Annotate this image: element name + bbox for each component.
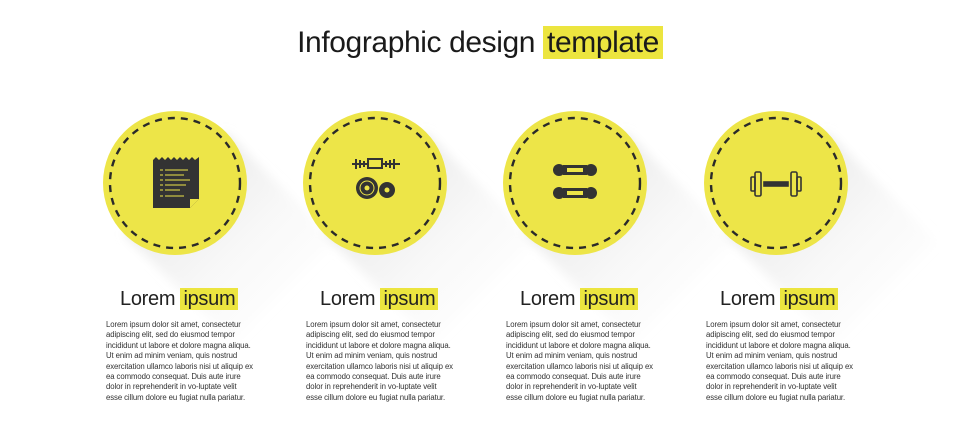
heading 1: Lorem ipsum	[120, 288, 235, 310]
icon: receipt	[153, 157, 199, 208]
circle 3	[503, 111, 647, 255]
icon: barbell and plates	[352, 159, 400, 199]
text 2: Lorem ipsum dolor sit amet, consectetur adipiscing elit, sed do eiusmod tempor incididunt ut labore et dolore magna aliqua. Ut enim ad minim veniam, quis nostrud exercitation ullamco laboris nisi ut aliquip ex ea commodo consequat. Duis aute irure dolor in reprehenderit in vo-luptate velit esse cillum dolore eu fugiat nulla pariatur.	[306, 320, 453, 402]
circle 4	[704, 111, 848, 255]
text 4: Lorem ipsum dolor sit amet, consectetur adipiscing elit, sed do eiusmod tempor incididunt ut labore et dolore magna aliqua. Ut enim ad minim veniam, quis nostrud exercitation ullamco laboris nisi ut aliquip ex ea commodo consequat. Duis aute irure dolor in reprehenderit in vo-luptate velit esse cillum dolore eu fugiat nulla pariatur.	[706, 320, 853, 402]
text 1: Lorem ipsum dolor sit amet, consectetur adipiscing elit, sed do eiusmod tempor incididunt ut labore et dolore magna aliqua. Ut enim ad minim veniam, quis nostrud exercitation ullamco laboris nisi ut aliquip ex ea commodo consequat. Duis aute irure dolor in reprehenderit in vo-luptate velit esse cillum dolore eu fugiat nulla pariatur.	[106, 320, 253, 402]
title: Infographic design template	[297, 26, 659, 59]
heading 3: Lorem ipsum	[520, 288, 635, 310]
heading 4: Lorem ipsum	[720, 288, 835, 310]
circle 1	[103, 111, 247, 255]
heading 2: Lorem ipsum	[320, 288, 435, 310]
circle 2	[303, 111, 447, 255]
icon: dumbbells	[553, 164, 597, 199]
text 3: Lorem ipsum dolor sit amet, consectetur adipiscing elit, sed do eiusmod tempor incididunt ut labore et dolore magna aliqua. Ut enim ad minim veniam, quis nostrud exercitation ullamco laboris nisi ut aliquip ex ea commodo consequat. Duis aute irure dolor in reprehenderit in vo-luptate velit esse cillum dolore eu fugiat nulla pariatur.	[506, 320, 653, 402]
icon: dumbbell outline	[751, 172, 801, 196]
